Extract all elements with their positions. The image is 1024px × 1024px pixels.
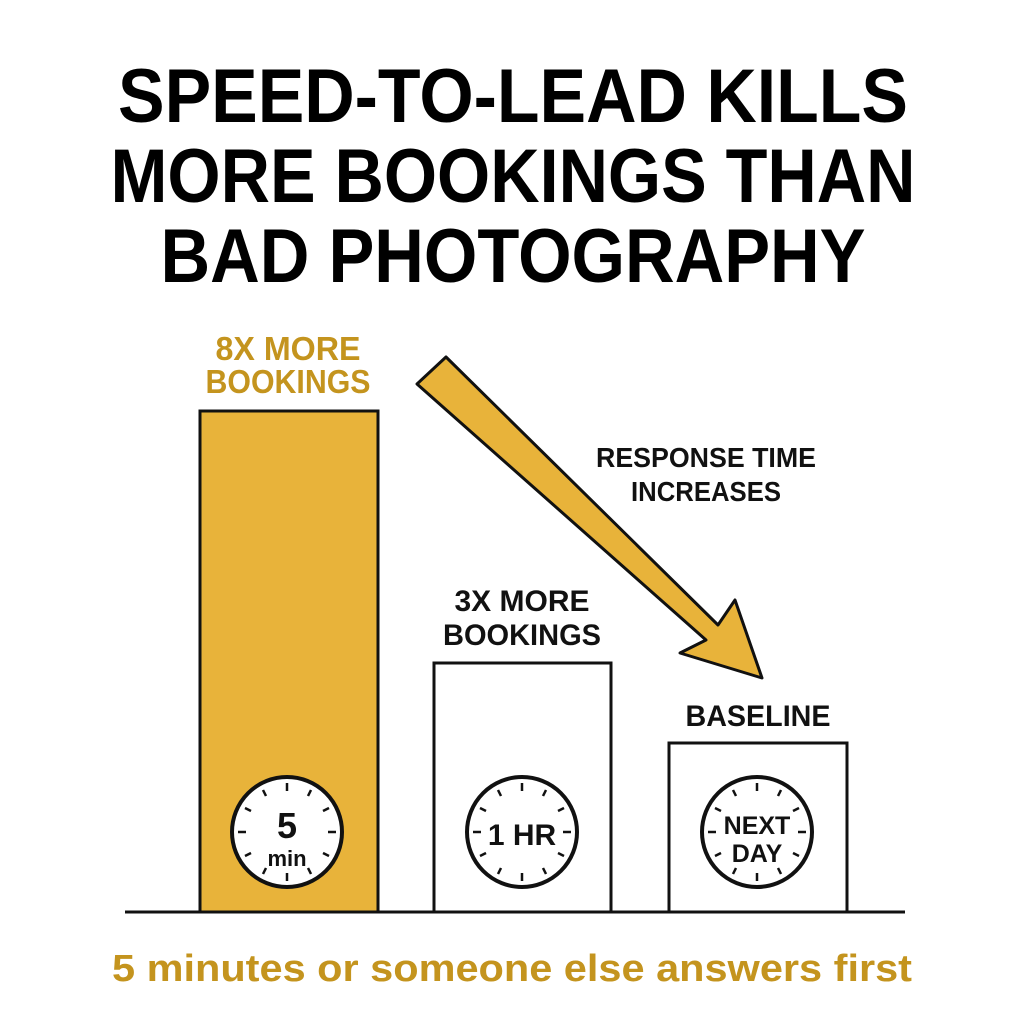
title: SPEED-TO-LEAD KILLS: [118, 54, 908, 139]
axis baseline: [125, 910, 905, 914]
label: 3x more bookings: 3X MORE: [454, 585, 590, 618]
label: response time increases: INCREASES: [631, 476, 781, 507]
label: response time increases: RESPONSE TIME: [596, 442, 816, 473]
label: 8x more bookings: 8X MORE: [216, 330, 360, 367]
clock: next day: [702, 777, 812, 887]
title: BAD PHOTOGRAPHY: [160, 214, 866, 299]
clock: next day: NEXT: [724, 812, 790, 840]
clock: 5 min: min: [267, 846, 307, 871]
bar: next day: [669, 743, 847, 912]
title: MORE BOOKINGS THAN: [110, 134, 916, 219]
label: 8x more bookings: [206, 330, 370, 400]
bar: 5 min: [200, 411, 378, 912]
footer tagline: 5 minutes or someone else answers first: [112, 948, 912, 990]
label: 8x more bookings: BOOKINGS: [206, 363, 370, 400]
label: 3x more bookings: BOOKINGS: [443, 619, 601, 652]
arrow: response time increases: [417, 357, 762, 678]
label: 3x more bookings: [443, 585, 601, 652]
clock: 5 min: 5: [277, 805, 297, 846]
bar: 1 hr: [434, 663, 611, 912]
clock: next day: DAY: [732, 840, 783, 868]
clock: 1 hr: 1 HR: [488, 819, 557, 852]
title: [110, 54, 916, 299]
clock: 1 hr: [467, 777, 577, 887]
label: response time increases: [596, 442, 816, 507]
label: baseline: BASELINE: [686, 700, 830, 733]
clock: 5 min: [232, 777, 342, 887]
